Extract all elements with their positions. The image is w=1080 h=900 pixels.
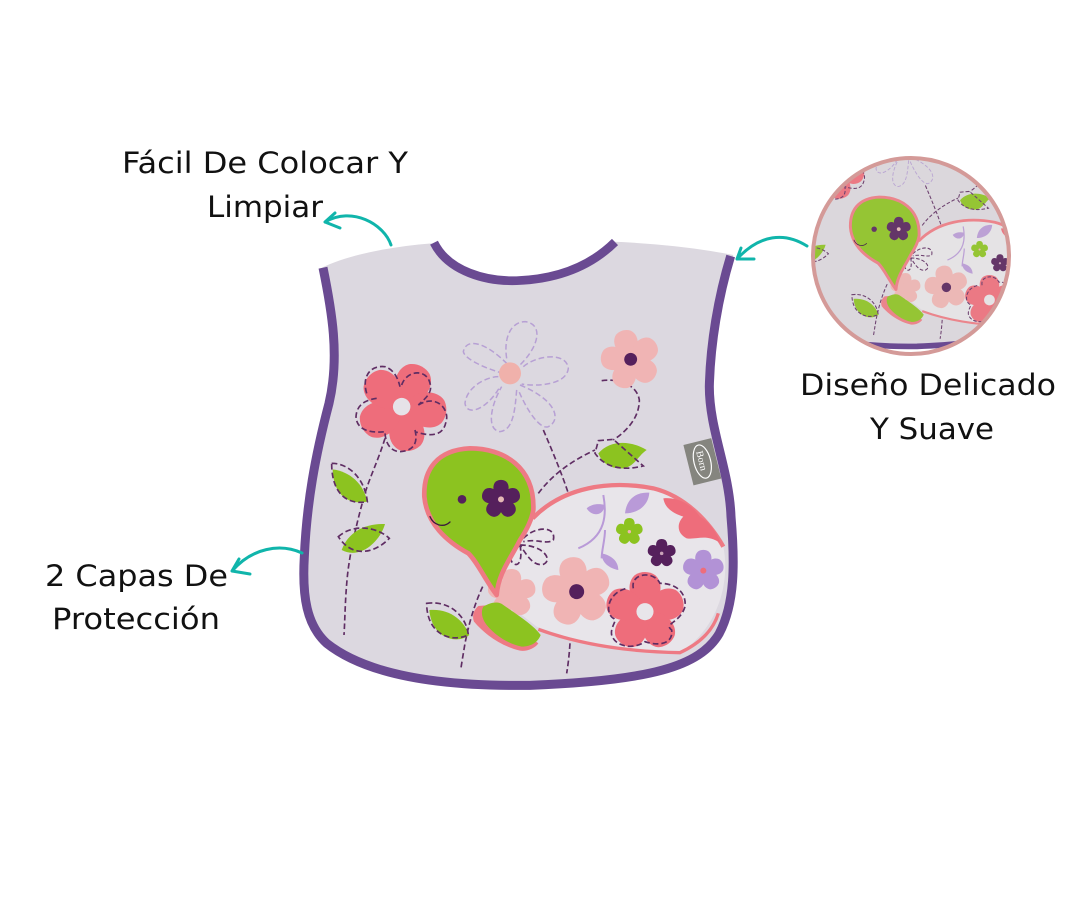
- magnified bib: [815, 160, 1007, 350]
- brand tag: Born: [693, 450, 709, 472]
- red flower: [338, 346, 464, 469]
- product photo: baby bib: [303, 242, 736, 687]
- turtle foot: [473, 603, 541, 651]
- brand tag: [683, 438, 721, 485]
- label: Fácil De Colocar Y Limpiar: [122, 146, 409, 224]
- shell outline: [533, 485, 723, 547]
- arrow: top left to neck: [325, 213, 391, 245]
- circle border: [813, 158, 1009, 354]
- purple edge binding: [304, 256, 733, 685]
- turtle smile: [430, 517, 450, 525]
- stitched stems: [344, 380, 639, 673]
- head flower: [480, 480, 522, 520]
- lavender flower centre: [499, 362, 521, 384]
- light pink flower top right: [592, 322, 670, 398]
- arrow: bottom left to edge: [232, 548, 302, 574]
- shell pattern: [486, 493, 726, 653]
- label: Fácil De Colocar Y Limpiar: Limpiar: [207, 190, 324, 224]
- leaves: [332, 439, 647, 639]
- bib fabric: [303, 242, 736, 687]
- turtle shell: [498, 485, 725, 653]
- purple neck binding: [434, 242, 615, 281]
- label: Diseño Delicado Y Suave: Y Suave: [869, 412, 994, 446]
- red flower stitching: [356, 367, 447, 452]
- outlined lavender flower: [463, 322, 568, 432]
- turtle eye: [458, 495, 466, 504]
- turtle head: [424, 448, 533, 595]
- label: Diseño Delicado Y Suave: Diseño Delicado: [800, 368, 1056, 402]
- label: Diseño Delicado Y Suave: [800, 368, 1056, 446]
- label: 2 Capas De Protección: Protección: [52, 602, 220, 636]
- label: 2 Capas De Protección: 2 Capas De: [45, 559, 228, 593]
- arrow: circle detail to shoulder: [737, 237, 807, 259]
- label: Fácil De Colocar Y Limpiar: Fácil De Colocar Y: [122, 146, 409, 180]
- label: 2 Capas De Protección: [45, 559, 228, 636]
- detail circle: [811, 156, 1011, 356]
